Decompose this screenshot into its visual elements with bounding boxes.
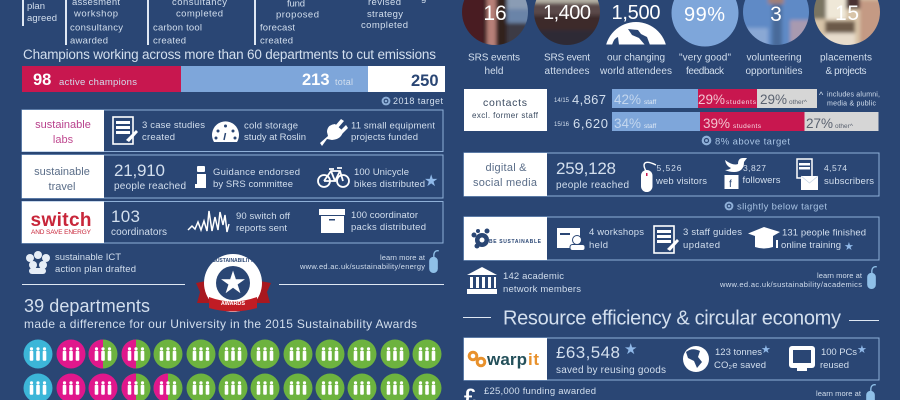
panel: warpit — [464, 338, 879, 380]
panel: sustainable labs: 11 small equipment — [351, 120, 435, 132]
panel: warpit: reused — [820, 360, 849, 371]
panel: digital and social media: people reached — [556, 180, 629, 191]
timeline milestones: created — [260, 36, 293, 46]
contacts 14/15 bar: 14/15 — [554, 98, 570, 104]
funding — [464, 384, 596, 400]
stat: placements and projects: placements — [820, 52, 872, 64]
slightly below target: slightly below target — [737, 202, 827, 212]
icon: box — [319, 209, 345, 233]
timeline milestones: strategy — [367, 9, 403, 20]
stat: SRS events held — [462, 0, 528, 74]
panel: warpit: £63,548 — [556, 343, 620, 362]
champions heading: Champions working across more than 60 departments to cut emissions — [23, 47, 436, 62]
departments heading — [24, 296, 417, 331]
panel: switch and save energy: 103 — [111, 207, 140, 226]
contacts 15/16 bar: 34% — [614, 116, 641, 131]
stat: SRS event attendees: 1,400 — [543, 2, 591, 24]
icon: gauge — [212, 121, 239, 142]
timeline milestones: completed — [176, 8, 223, 20]
panel: digital and social media: 5,526 — [656, 163, 682, 173]
panel: warpit: ★ — [857, 344, 867, 356]
panel: warpit: ★ — [761, 344, 771, 356]
stat: very good feedback: 99% — [684, 4, 725, 26]
icon: institution — [467, 267, 497, 294]
panel: be sustainable: 131 people finished — [782, 228, 866, 238]
contacts 14/15 bar: 29% — [760, 92, 787, 107]
stat: SRS event attendees: SRS event — [544, 52, 590, 64]
learn more: energy — [299, 251, 439, 273]
icon: twitter — [725, 158, 747, 172]
panel: sustainable travel: ★ — [424, 173, 438, 190]
icon: case studies — [113, 117, 138, 144]
panel: sustainable travel: travel — [49, 181, 75, 193]
panel: warpit: CO₂e saved — [714, 360, 766, 371]
icon: earth — [683, 346, 709, 372]
panel: sustainable travel: Guidance endorsed — [213, 167, 300, 178]
icon: computer — [789, 346, 815, 371]
badge: sustainability awards: SUSTAINABILITY — [212, 258, 254, 264]
panel: switch and save energy: reports sent — [236, 223, 287, 234]
stat: very good feedback: "very good" — [679, 52, 731, 64]
panel: warpit: ★ — [624, 341, 637, 358]
icon: group — [26, 251, 50, 274]
2018 target: 2018 target — [393, 96, 443, 106]
stat: placements and projects: 15 — [835, 2, 859, 25]
department award circles — [24, 340, 442, 400]
panel: digital and social media: digital & — [486, 162, 527, 174]
stat: very good feedback: feedback — [686, 66, 725, 77]
panel: be sustainable: 3 staff guides — [683, 227, 742, 238]
stat: placements and projects: & projects — [826, 66, 866, 77]
champions progress bar — [22, 66, 445, 92]
ICT action plan: sustainable ICT — [55, 252, 121, 263]
icon: workshop — [557, 228, 585, 250]
ICT action plan: action plan drafted — [55, 264, 136, 275]
panel: sustainable labs: sustainable — [35, 119, 91, 131]
panel: be sustainable: ★ — [844, 241, 854, 253]
stat: our changing world attendees: our changing — [607, 52, 665, 64]
panel: be sustainable: held — [589, 240, 608, 251]
panel: sustainable labs: 3 case studies — [142, 120, 205, 131]
panel: sustainable labs: labs — [53, 134, 74, 146]
stat: volunteering opportunities: 3 — [770, 3, 782, 26]
panel: digital and social media: social media — [473, 177, 538, 189]
8% above target: 8% above target — [715, 136, 790, 148]
academic network: network members — [503, 284, 581, 295]
contacts 14/15 bar: students — [726, 99, 757, 106]
timeline milestones: carbon tool — [153, 22, 202, 34]
panel: switch and save energy: coordinators — [111, 227, 167, 238]
stat: volunteering opportunities — [743, 0, 809, 76]
champions progress bar: active champions — [59, 77, 137, 88]
learn more: academics — [719, 267, 877, 289]
contacts 15/16 bar: students — [733, 123, 762, 130]
divider lines — [22, 284, 444, 285]
panel: sustainable travel: by SRS committee — [213, 179, 293, 190]
panel: digital and social media: followers — [742, 175, 781, 186]
logo: be sustainable — [472, 228, 542, 248]
contacts 15/16 bar: staff — [644, 123, 656, 130]
timeline milestones: awarded — [70, 36, 108, 46]
panel: sustainable labs: study at Roslin — [244, 132, 306, 143]
panel: digital and social media: 4,574 — [824, 163, 847, 173]
champions progress bar: 250 — [411, 72, 439, 90]
icon: bicycle — [318, 168, 349, 187]
stat: our changing world attendees: world attendees — [599, 66, 672, 77]
panel: digital and social media: subscribers — [824, 176, 874, 187]
champions progress bar: 98 — [33, 71, 51, 89]
stat: SRS events held: 16 — [483, 2, 507, 25]
panel: sustainable labs — [22, 110, 443, 152]
panel: be sustainable: online training — [781, 240, 841, 251]
icon: plug — [320, 119, 348, 146]
panel: contacts — [464, 89, 880, 131]
learn more: resources: learn more at — [816, 389, 862, 398]
panel: switch and save energy: AND SAVE ENERGY — [31, 229, 92, 236]
footnote: media & public — [827, 100, 876, 108]
panel: sustainable travel: bikes distributed — [354, 179, 425, 190]
contacts 15/16 bar: other^ — [835, 123, 854, 130]
footnote: includes alumni, — [827, 92, 880, 98]
timeline milestones: forecast — [260, 22, 295, 34]
contacts 15/16 bar: 15/16 — [554, 122, 570, 128]
stat: placements and projects — [814, 0, 880, 76]
panel: contacts: excl. former staff — [472, 111, 539, 120]
footnote: ^ — [819, 90, 824, 100]
panel: digital and social media: 3,827 — [743, 163, 766, 173]
stat: our changing world attendees: 1,500 — [612, 2, 660, 24]
panel: sustainable travel: 100 Unicycle — [354, 167, 409, 178]
panel: digital and social media: 259,128 — [556, 159, 616, 178]
panel: switch and save energy: 100 coordinator — [351, 210, 418, 221]
icon: newsletter and envelope — [797, 159, 818, 190]
panel: sustainable travel — [22, 155, 443, 198]
academic network: 142 academic — [503, 271, 564, 282]
panel: contacts: contacts — [483, 97, 527, 109]
panel: digital and social media — [464, 153, 879, 196]
learn more: energy: www.ed.ac.uk/sustainability/energy — [299, 262, 425, 271]
stat: volunteering opportunities: volunteering — [746, 52, 802, 64]
panel: warpit: 100 PCs — [821, 347, 857, 358]
learn more: academics: www.ed.ac.uk/sustainability/academics — [719, 280, 862, 289]
panel: digital and social media: web visitors — [655, 176, 707, 187]
timeline milestones: created — [153, 36, 186, 46]
panel: sustainable labs: cold storage — [244, 120, 298, 132]
icon: facebook — [724, 175, 738, 190]
champions progress bar: total — [335, 77, 353, 87]
panel: switch and save energy: 90 switch off — [236, 211, 290, 222]
logo: be sustainable: BE SUSTAINABLE — [489, 239, 542, 245]
contacts 15/16 bar: 27% — [806, 116, 833, 131]
contacts 15/16 bar — [554, 112, 878, 131]
icon: staff guides — [654, 226, 679, 253]
heading: resource efficiency: Resource efficiency & circular economy — [503, 308, 841, 330]
stat: SRS event attendees — [534, 0, 600, 74]
panel: sustainable travel: 21,910 — [114, 161, 165, 180]
learn more: academics: learn more at — [817, 271, 863, 280]
contacts 14/15 bar: 42% — [614, 92, 641, 107]
contacts 14/15 bar: 4,867 — [572, 92, 606, 107]
contacts 14/15 bar: staff — [644, 99, 656, 106]
badge: sustainability awards: ★ — [219, 265, 247, 300]
contacts 15/16 bar: 6,620 — [573, 116, 608, 131]
stat: SRS events held: held — [485, 66, 503, 77]
icon: facebook: f — [729, 179, 732, 190]
panel: sustainable travel: sustainable — [34, 166, 90, 178]
icon: energy wave — [188, 211, 229, 232]
contacts 14/15 bar: 29% — [698, 92, 725, 107]
panel: be sustainable: updated — [683, 240, 720, 251]
academic network — [467, 267, 581, 295]
panel: sustainable labs: projects funded — [351, 132, 418, 143]
learn more: energy: learn more at — [380, 253, 426, 262]
stat: very good feedback — [672, 0, 738, 77]
panel: be sustainable: 4 workshops — [589, 227, 644, 238]
departments heading: 39 departments — [24, 296, 150, 316]
panel: switch and save energy: packs distributed — [351, 222, 426, 233]
timeline milestones: workshop — [73, 8, 118, 20]
icon: info — [195, 166, 206, 188]
footnote — [819, 90, 880, 108]
contacts 14/15 bar: other^ — [789, 99, 808, 106]
timeline milestones: agreed — [27, 13, 57, 24]
panel: sustainable labs: created — [142, 132, 175, 143]
champions progress bar: 213 — [302, 71, 330, 89]
funding: £25,000 funding awarded — [484, 386, 596, 397]
logo: warpit — [469, 350, 539, 369]
stat: our changing world attendees — [600, 5, 672, 74]
badge: sustainability awards — [196, 254, 271, 312]
timeline milestones: plan — [27, 1, 45, 12]
learn more: resources — [816, 385, 876, 400]
logo: warpit: it — [528, 350, 539, 369]
timeline milestones — [22, 0, 426, 46]
badge: sustainability awards: AWARDS — [221, 301, 245, 307]
timeline milestones: consultancy — [70, 22, 123, 34]
timeline milestones: completed — [361, 20, 408, 31]
logo: warpit: warp — [486, 350, 527, 369]
contacts 15/16 bar: 39% — [703, 116, 730, 131]
panel: warpit: saved by reusing goods — [556, 365, 666, 376]
panel: switch and save energy: switch — [30, 210, 92, 231]
panel: sustainable travel: people reached — [114, 181, 186, 192]
ICT action plan — [26, 251, 136, 275]
icon: mouse — [641, 162, 656, 192]
contacts 14/15 bar — [554, 89, 817, 108]
stat: SRS event attendees: attendees — [544, 66, 590, 77]
icon: graduation cap — [748, 227, 780, 248]
departments heading: made a difference for our University in the 2015 Sustainability Awards — [24, 317, 417, 331]
stat: volunteering opportunities: opportunities — [746, 66, 802, 77]
icon: globe — [606, 22, 666, 44]
panel: warpit: 123 tonnes — [715, 347, 762, 358]
stat: SRS events held: SRS events — [468, 52, 520, 64]
timeline milestones: proposed — [276, 10, 319, 20]
panel: be sustainable — [464, 217, 879, 260]
panel: switch and save energy — [22, 202, 443, 243]
